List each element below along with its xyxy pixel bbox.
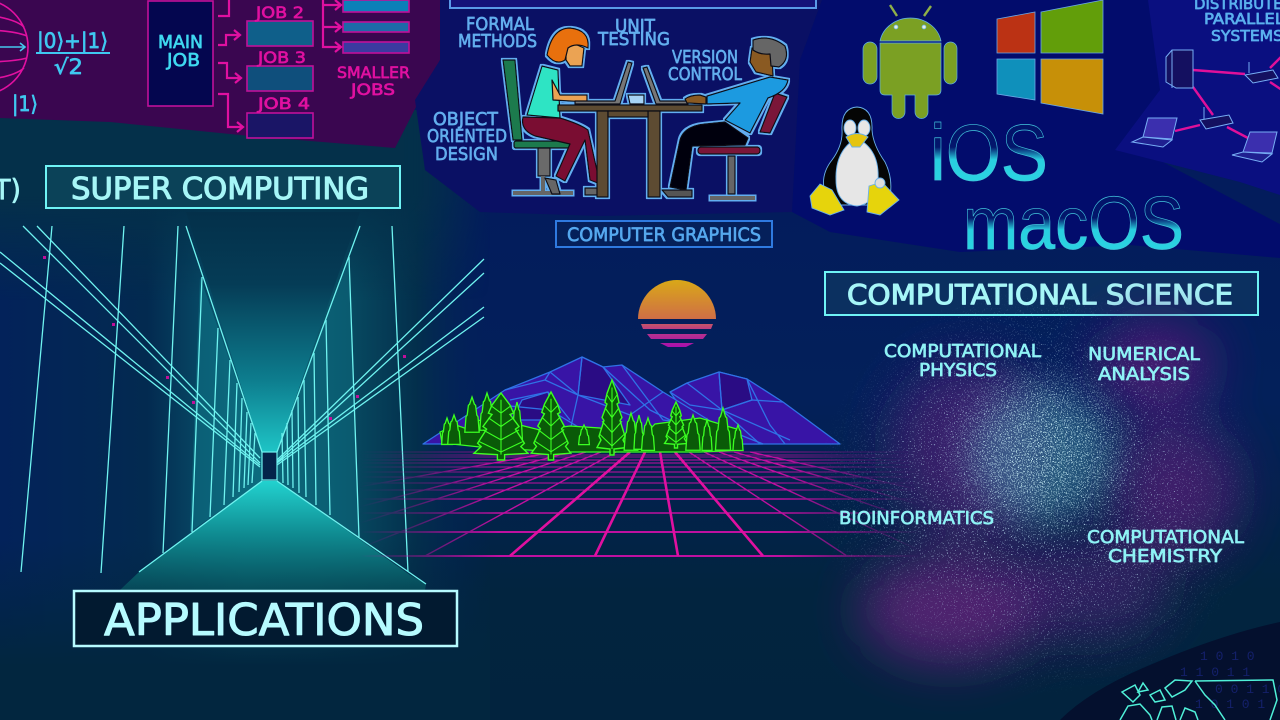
labels: computational science fields — [839, 341, 1244, 567]
illustration: particle nebula — [810, 290, 1280, 700]
title: Applications: APPLICATIONS — [104, 595, 424, 646]
binary digits: 1 1 0 1 1 — [1180, 665, 1250, 680]
icon: Linux penguin — [810, 107, 899, 215]
labels: computational science fields: ANALYSIS — [1098, 364, 1190, 385]
job boxes — [247, 0, 409, 138]
title: Computational Science — [825, 272, 1258, 315]
laptops and mug — [575, 62, 688, 104]
cables — [0, 226, 484, 467]
title: Computer Graphics: COMPUTER GRAPHICS — [567, 224, 761, 246]
panel: quantum bit — [0, 0, 110, 117]
icon: Android — [863, 5, 957, 119]
binary digits — [1180, 649, 1280, 712]
job labels: JOBS — [350, 80, 395, 99]
job labels — [255, 3, 410, 113]
labels: CONTROL — [668, 64, 742, 85]
labels: VERSION — [672, 47, 738, 68]
panel: supercomputing background — [0, 110, 462, 654]
formula: √2 — [54, 55, 83, 79]
labels: computational science fields: CHEMISTRY — [1108, 546, 1223, 567]
man's chair — [698, 93, 787, 198]
illustration: low-poly forest — [440, 380, 743, 460]
perspective edges — [139, 226, 426, 584]
macOS wordmark: macOS — [963, 181, 1184, 265]
floor — [120, 481, 426, 590]
label: PARALLEL — [1204, 10, 1280, 28]
labels: computational science fields: COMPUTATIONAL — [1087, 527, 1244, 548]
labels: computational science fields: BIOINFORMATICS — [839, 508, 994, 529]
panel: software engineering — [427, 14, 788, 198]
far door — [262, 452, 277, 480]
formula: |0⟩+|1⟩ — [37, 29, 108, 54]
labels: computational science fields: COMPUTATIONAL — [884, 341, 1041, 362]
illustration: data centre corridor — [0, 226, 484, 590]
icon: Windows — [997, 0, 1103, 114]
job labels: SMALLER — [337, 63, 410, 82]
labels: FORMAL — [466, 14, 534, 35]
illustration: two developers at a table — [503, 28, 788, 198]
man — [662, 38, 788, 197]
panel: operating systems — [810, 0, 1184, 265]
rack status lights — [43, 256, 406, 420]
labels: METHODS — [458, 31, 537, 52]
table — [558, 105, 702, 197]
illustration: wireframe mountains — [423, 357, 840, 444]
arrows — [218, 0, 341, 132]
labels: TESTING — [597, 29, 670, 50]
woman's chair — [503, 60, 573, 193]
main job label: MAIN — [158, 32, 203, 53]
vertical racks — [21, 226, 408, 573]
panel: quantum and parallel jobs background — [0, 0, 440, 148]
job labels: JOB 4 — [257, 94, 310, 113]
main job label — [158, 32, 203, 71]
job labels: JOB 2 — [255, 3, 304, 22]
top label box — [450, 0, 816, 8]
iOS wordmark: iOS — [930, 108, 1048, 197]
title: Super Computing: SUPER COMPUTING — [71, 172, 369, 207]
job labels: JOB 3 — [257, 48, 306, 67]
formula — [12, 29, 110, 117]
labels: DESIGN — [435, 144, 498, 165]
labels: computational science fields: NUMERICAL — [1088, 344, 1200, 365]
binary digits: 1 0 1 0 — [1200, 649, 1255, 664]
network links — [1175, 56, 1280, 138]
panel: main job split diagram — [148, 0, 410, 138]
main job box — [148, 1, 213, 106]
illustration: magenta perspective grid — [367, 451, 912, 557]
title: Super Computing — [46, 166, 400, 208]
title: Computational Science: COMPUTATIONAL SCIENCE — [847, 278, 1233, 311]
label: SYSTEMS — [1211, 27, 1280, 45]
labels: OBJECT — [433, 109, 499, 130]
main job label: JOB — [166, 50, 200, 71]
labels: computational science fields: PHYSICS — [919, 360, 997, 381]
panel: distributed systems background — [1115, 0, 1280, 195]
panel: software engineering background — [415, 0, 822, 216]
panel: big data corner — [1060, 622, 1280, 720]
labels: ORIENTED — [427, 126, 507, 147]
panel: distributed parallel systems — [1132, 0, 1280, 162]
label — [1194, 0, 1280, 45]
binary digits: 1 0 1 0 1 — [1195, 697, 1265, 712]
panel: operating systems background — [792, 0, 1280, 258]
illustration: retro sun — [638, 280, 716, 347]
network devices — [1132, 50, 1278, 162]
labels: UNIT — [615, 16, 656, 37]
icon: Bloch sphere — [0, 0, 28, 95]
labels — [427, 14, 742, 165]
woman — [522, 28, 600, 195]
formula: |1⟩ — [12, 92, 38, 117]
icon: world map fragment — [1120, 680, 1277, 720]
